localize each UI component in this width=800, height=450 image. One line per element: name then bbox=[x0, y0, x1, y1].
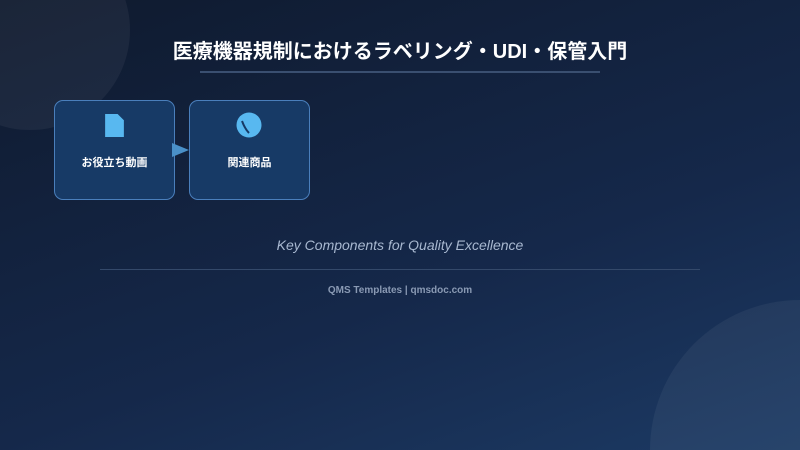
card: 関連商品: 関連商品 bbox=[228, 157, 272, 169]
card: お役立ち動画: お役立ち動画 bbox=[82, 157, 148, 169]
icon: document bbox=[105, 114, 124, 137]
subtitle: Key Components for Quality Excellence bbox=[277, 237, 523, 253]
arrow bbox=[172, 143, 189, 157]
card: お役立ち動画 bbox=[54, 100, 175, 200]
icon: globe bbox=[236, 112, 262, 138]
footer: QMS Templates | qmsdoc.com bbox=[328, 285, 472, 296]
title: 医療機器規制におけるラベリング・UDI・保管入門 bbox=[173, 41, 627, 63]
card: 関連商品 bbox=[189, 100, 310, 200]
